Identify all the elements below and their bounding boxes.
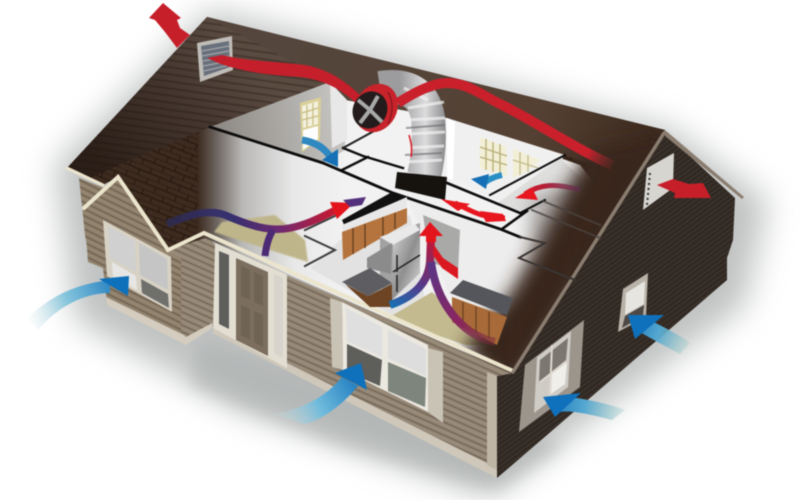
right room [448,118,564,160]
duct plenum box [395,172,447,200]
tan floor [214,215,308,262]
window: big right wall with shutters [519,320,584,432]
roof fade back over interior [453,145,650,374]
arrow: red exit right gable [657,179,711,198]
duct: flexible silver [380,87,445,176]
counter: right with cabinets [450,280,513,345]
interior: cutaway rooms [198,82,650,374]
roof underside: left planks [67,17,345,178]
room wall beside window [330,82,347,148]
arrow: red in hallway [441,199,506,222]
wall: foundation of front gable [106,297,212,345]
arrow: blue outside, right wall upper [628,315,690,354]
vent: right gable [643,153,674,210]
window: front big window with shutters [330,298,443,423]
wall: inner corner wall [165,234,214,337]
kitchen floor area [310,215,425,320]
arrow: red stream leaving fan to right gable [398,83,612,165]
fan: red ring with blades [346,76,406,140]
counter: stove area [342,268,392,307]
arrow: mixed airflow to left window [167,197,366,256]
window: left gable window [103,220,172,312]
window: small right wall [618,273,648,332]
refrigerator [367,223,420,300]
kitchen cabinets and counter [342,192,407,260]
roof underside: attic band [207,17,665,165]
wall: far-left small wall [79,178,104,268]
arrow: red return, right room [515,185,580,200]
wall: right side dark gable wall [497,130,744,478]
arrow: blue, back-left room [302,140,338,167]
roof trim: eaves [67,133,664,372]
roof: shingled [67,17,665,374]
arrow: red exit at top-left vent [149,3,190,48]
arrow: blue outside, left window [28,276,129,330]
wall: main front wall [205,240,513,478]
window: back-left room [300,97,321,152]
back wall: left room [210,82,345,163]
arrow: red stream into fan [207,55,370,110]
room partition lines [210,125,600,280]
wall: front gable wall [84,177,186,343]
arrow: blue, back-right room [471,174,502,189]
arrow: blue outside, front window [272,363,367,424]
arrow: blue outside, right wall lower [543,393,625,420]
door with sidelights [213,243,287,368]
center wall [407,198,535,320]
arrow: mixed airflow up center [390,222,495,342]
window: back-right room [480,137,540,178]
gable trim [665,130,744,199]
attic vent: left [197,36,233,82]
interior base [198,84,590,374]
